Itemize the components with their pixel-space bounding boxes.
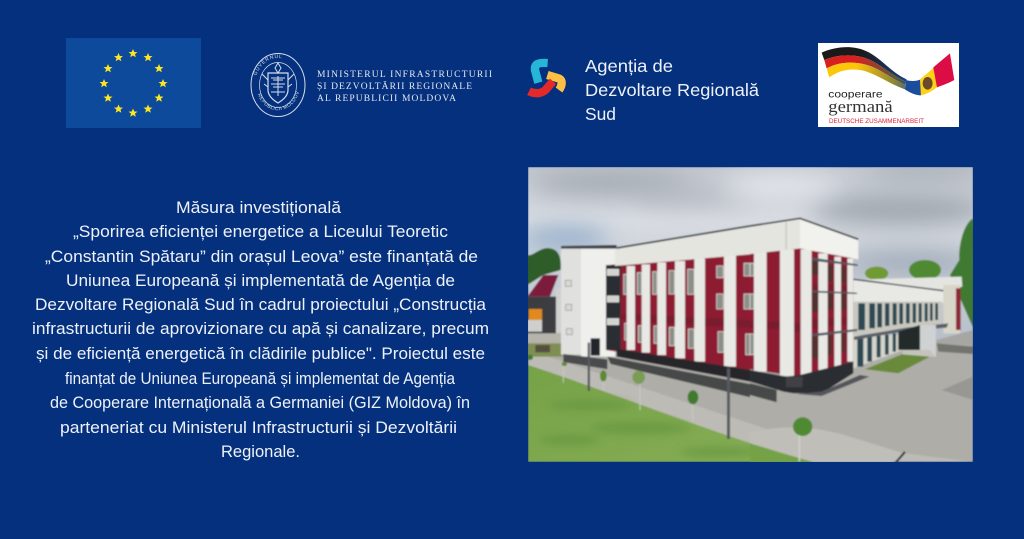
text block: project description: parteneriat cu Ministerul Infrastructurii și Dezvoltării — [60, 419, 457, 437]
main building, left half — [527, 226, 750, 439]
cooperare germană wordmark: germană — [828, 97, 893, 116]
logo: cooperare germană — [818, 43, 959, 127]
cooperare germană wordmark — [828, 89, 924, 125]
cooperare germană wordmark: DEUTSCHE ZUSAMMENARBEIT — [829, 118, 924, 125]
sapling and curb — [797, 436, 802, 462]
background buildings and trees, left — [527, 248, 563, 357]
ministry name: AL REPUBLICII MOLDOVA — [317, 94, 456, 104]
text block: project description: și de eficiență energetică în clădirile publice". Proiectul este — [36, 345, 485, 363]
stair tower — [561, 245, 617, 369]
right wing and background — [750, 218, 973, 463]
text block: project description: „Sporirea eficienței energetice a Liceului Teoretic — [73, 223, 448, 241]
logo: Agenția de Dezvoltare Regională Sud — [529, 56, 759, 124]
text block: project description: Dezvoltare Regională Sud în cadrul proiectului „Construcția — [35, 296, 486, 314]
text block: project description: finanțat de Uniunea Europeană și implementat de Agenția — [65, 370, 455, 388]
text block: project description: Regionale. — [221, 443, 300, 461]
top band — [750, 218, 800, 254]
windows — [624, 263, 750, 355]
lamp poles and saplings — [527, 343, 730, 439]
top band — [615, 226, 750, 266]
white pillars — [754, 249, 853, 377]
main building, right half — [750, 218, 905, 463]
cooperare germană wordmark: cooperare — [828, 89, 883, 100]
ministry name — [317, 70, 492, 104]
photo: school building — [520, 164, 990, 463]
text block: project description: infrastructurii de aprovizionare cu apă și canalizare, precum — [32, 320, 489, 338]
ministry name: ȘI DEZVOLTĂRII REGIONALE — [317, 80, 472, 92]
icon: government seal — [250, 53, 306, 117]
agency name: Sud — [585, 104, 616, 124]
icon: government seal: GUVERNUL — [254, 54, 282, 75]
sun louvres — [812, 258, 858, 337]
red facade — [606, 250, 750, 373]
logo: European Union flag — [66, 38, 201, 128]
white pillars — [627, 255, 736, 367]
corner block windows — [750, 263, 754, 355]
mid red bands — [620, 314, 750, 328]
ground: lawn — [528, 364, 751, 462]
logo: Ministerul Infrastructurii — [250, 53, 492, 117]
text block: project description: Uniunea Europeană și implementată de Agenția de — [66, 272, 455, 290]
text block: project description: Măsura investițională — [176, 199, 341, 217]
sky — [520, 164, 990, 347]
icon: agency knot — [529, 63, 562, 93]
agency name: Agenția de — [585, 56, 673, 76]
agency name — [585, 56, 759, 124]
text block: project description: de Cooperare Internațională a Germaniei (GIZ Moldova) în — [50, 394, 470, 412]
plinth — [750, 362, 853, 393]
text block: project description: „Constantin Spătaru” din orașul Leova” este finanțată de — [45, 248, 478, 266]
text block: project description — [32, 199, 489, 461]
agency name: Dezvoltare Regională — [585, 80, 759, 100]
ministry name: MINISTERUL INFRASTRUCTURII — [317, 70, 492, 80]
plinth — [617, 349, 750, 382]
ground: pavement — [528, 340, 973, 462]
icon: German-Moldovan ribbon — [822, 47, 954, 95]
